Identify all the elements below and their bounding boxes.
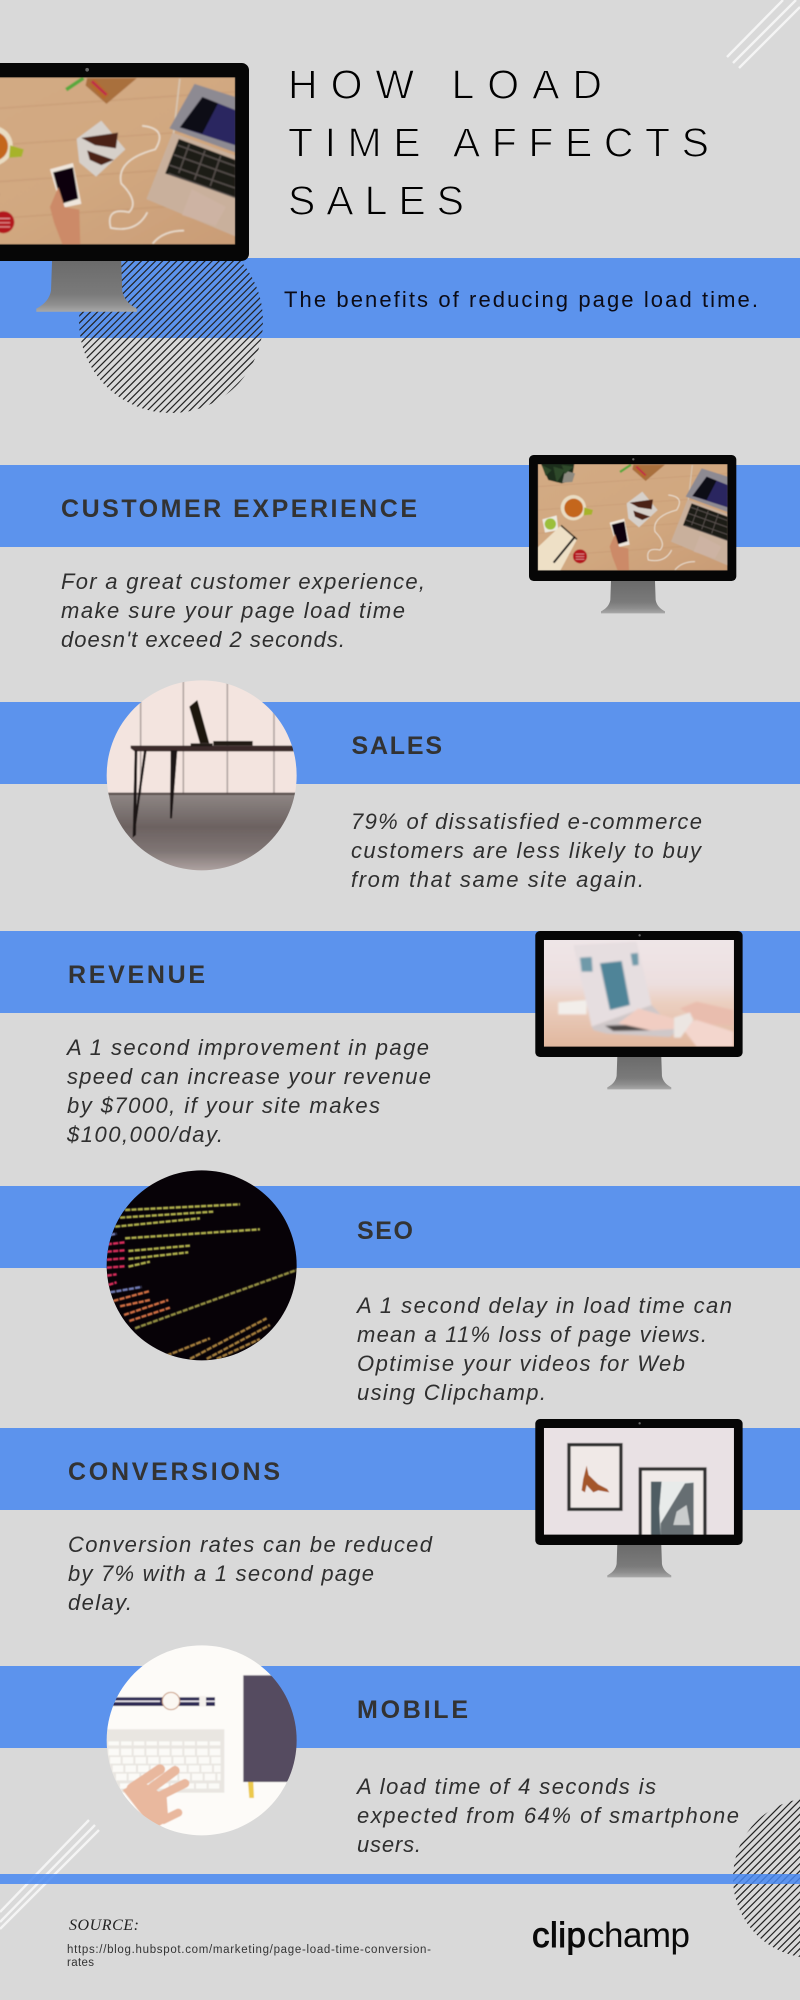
footer divider band (0, 1874, 800, 1884)
title (288, 62, 709, 224)
title: HOW LOAD (288, 62, 602, 108)
heading: MOBILE (357, 1696, 468, 1724)
title: SALES (288, 178, 464, 224)
monitor with laptop photo (535, 931, 743, 1089)
hatched circle behind hero monitor (101, 251, 241, 391)
heading: CUSTOMER EXPERIENCE (61, 495, 417, 523)
panel: seo (0, 1165, 800, 1405)
body text (65, 1035, 431, 1147)
source url: https://blog.hubspot.com/marketing/page-load-time-conversion- (67, 1944, 431, 1956)
circular photo: code on dark screen (106, 1170, 297, 1360)
subtitle: The benefits of reducing page load time. (284, 287, 758, 312)
body text: delay. (68, 1590, 132, 1615)
hero monitor with desk photo (0, 63, 249, 312)
body text: users. (357, 1832, 421, 1857)
body text: Conversion rates can be reduced (68, 1532, 433, 1557)
body text: make sure your page load time (61, 598, 405, 623)
body text: from that same site again. (351, 867, 644, 892)
panel: sales (0, 675, 800, 892)
body text: 79% of dissatisfied e-commerce (351, 809, 702, 834)
body text: mean a 11% loss of page views. (357, 1322, 707, 1347)
body text (68, 1532, 433, 1615)
body text: Optimise your videos for Web (357, 1351, 685, 1376)
body text: A load time of 4 seconds is (355, 1774, 656, 1799)
body text: customers are less likely to buy (351, 838, 703, 863)
band (0, 702, 800, 784)
body text: expected from 64% of smartphone (357, 1803, 739, 1828)
source (67, 1917, 431, 1969)
source url (67, 1944, 431, 1969)
clipchamp logo: clip (532, 1916, 586, 1955)
panel: revenue (0, 931, 800, 1147)
monitor with framed pictures photo (535, 1419, 743, 1577)
body text: doesn't exceed 2 seconds. (61, 627, 345, 652)
subtitle band (0, 258, 800, 338)
heading: SEO (357, 1217, 413, 1245)
monitor with desk photo (529, 455, 736, 613)
band (0, 931, 800, 1013)
body text: For a great customer experience, (61, 569, 425, 594)
panel: conversions (0, 1419, 800, 1615)
body text: by 7% with a 1 second page (68, 1561, 374, 1586)
title: TIME AFFECTS (288, 120, 709, 166)
body text (61, 569, 425, 652)
body text (355, 1293, 732, 1405)
body text: A 1 second improvement in page (65, 1035, 429, 1060)
source url: rates (67, 1957, 94, 1969)
body text: by $7000, if your site makes (67, 1093, 380, 1118)
decorative hatched circle, bottom right (753, 1818, 800, 1938)
heading: CONVERSIONS (68, 1458, 280, 1486)
band (0, 465, 800, 547)
clipchamp logo: champ (587, 1916, 690, 1955)
body text: speed can increase your revenue (67, 1064, 431, 1089)
source label: SOURCE: (69, 1917, 139, 1934)
circular photo: laptop on table (106, 680, 297, 870)
body text (351, 809, 703, 892)
band (0, 1186, 800, 1268)
panel: customer experience (0, 455, 800, 652)
panel: mobile (0, 1640, 800, 1857)
body text: A 1 second delay in load time can (355, 1293, 732, 1318)
body text (355, 1774, 739, 1857)
band (0, 1666, 800, 1748)
heading: REVENUE (68, 961, 205, 989)
clipchamp logo (532, 1916, 690, 1955)
decorative white diagonal lines, bottom left (0, 1820, 99, 1929)
heading: SALES (352, 732, 442, 760)
body text: using Clipchamp. (357, 1380, 546, 1405)
circular photo: keyboard, watch and notebook (106, 1645, 297, 1836)
band (0, 1428, 800, 1510)
decorative white diagonal lines, top right (727, 0, 800, 68)
body text: $100,000/day. (66, 1122, 223, 1147)
